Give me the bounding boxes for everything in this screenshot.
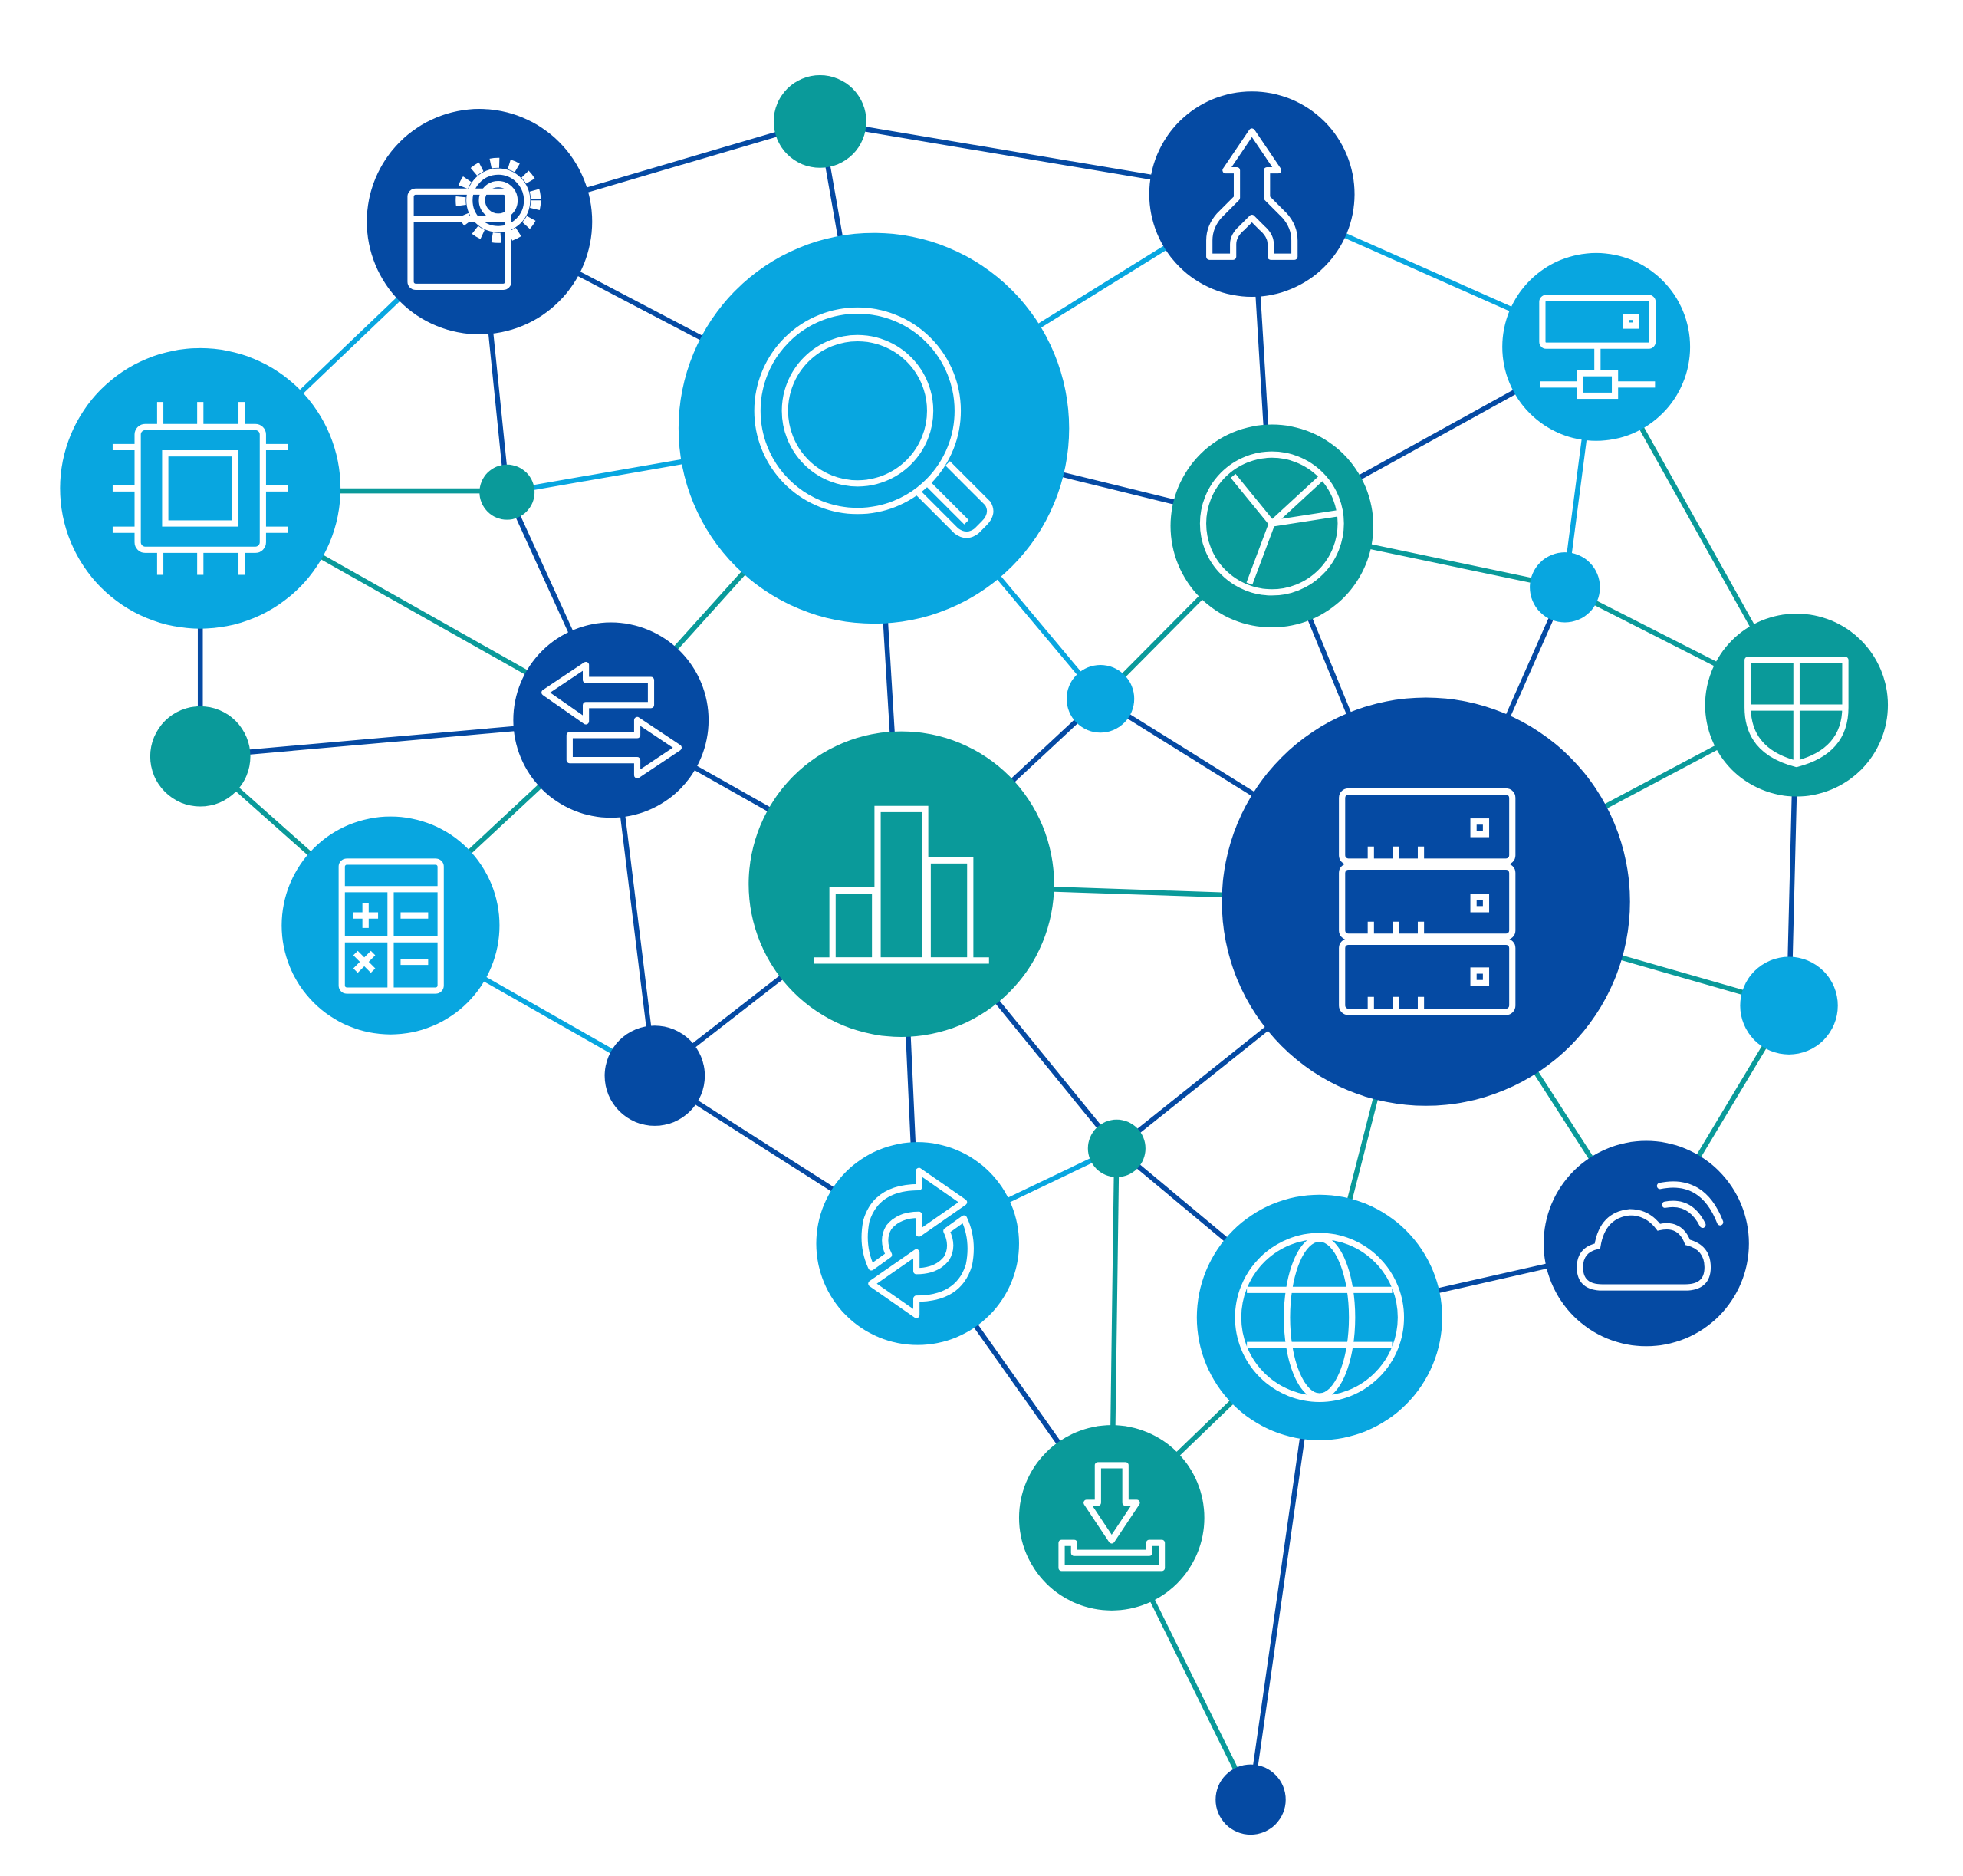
node: small light right xyxy=(1740,956,1838,1055)
node: pie xyxy=(1171,425,1373,627)
node: bar chart xyxy=(748,732,1054,1037)
node: network device xyxy=(1502,253,1690,441)
node: shield xyxy=(1705,614,1888,796)
node: server xyxy=(1222,697,1630,1106)
node: gear window xyxy=(367,109,592,334)
node: download xyxy=(1019,1425,1205,1611)
node: small teal center xyxy=(1088,1120,1146,1177)
node: small dark xyxy=(605,1025,705,1126)
node: small teal top xyxy=(774,75,866,168)
node: sync xyxy=(816,1142,1019,1345)
node: globe xyxy=(1197,1195,1442,1440)
node: cloud xyxy=(1544,1141,1749,1346)
node: small light xyxy=(1067,665,1134,732)
node: calculator xyxy=(281,817,499,1035)
node: small teal left xyxy=(150,706,251,807)
node: search xyxy=(679,233,1069,624)
node: fork xyxy=(1149,91,1355,297)
node: small dark bottom xyxy=(1215,1765,1286,1835)
node: small teal xyxy=(479,465,534,520)
node: small light xyxy=(1530,552,1600,623)
node: chip xyxy=(60,348,340,629)
node: arrows xyxy=(513,623,709,818)
connecting edges xyxy=(200,121,1797,1799)
